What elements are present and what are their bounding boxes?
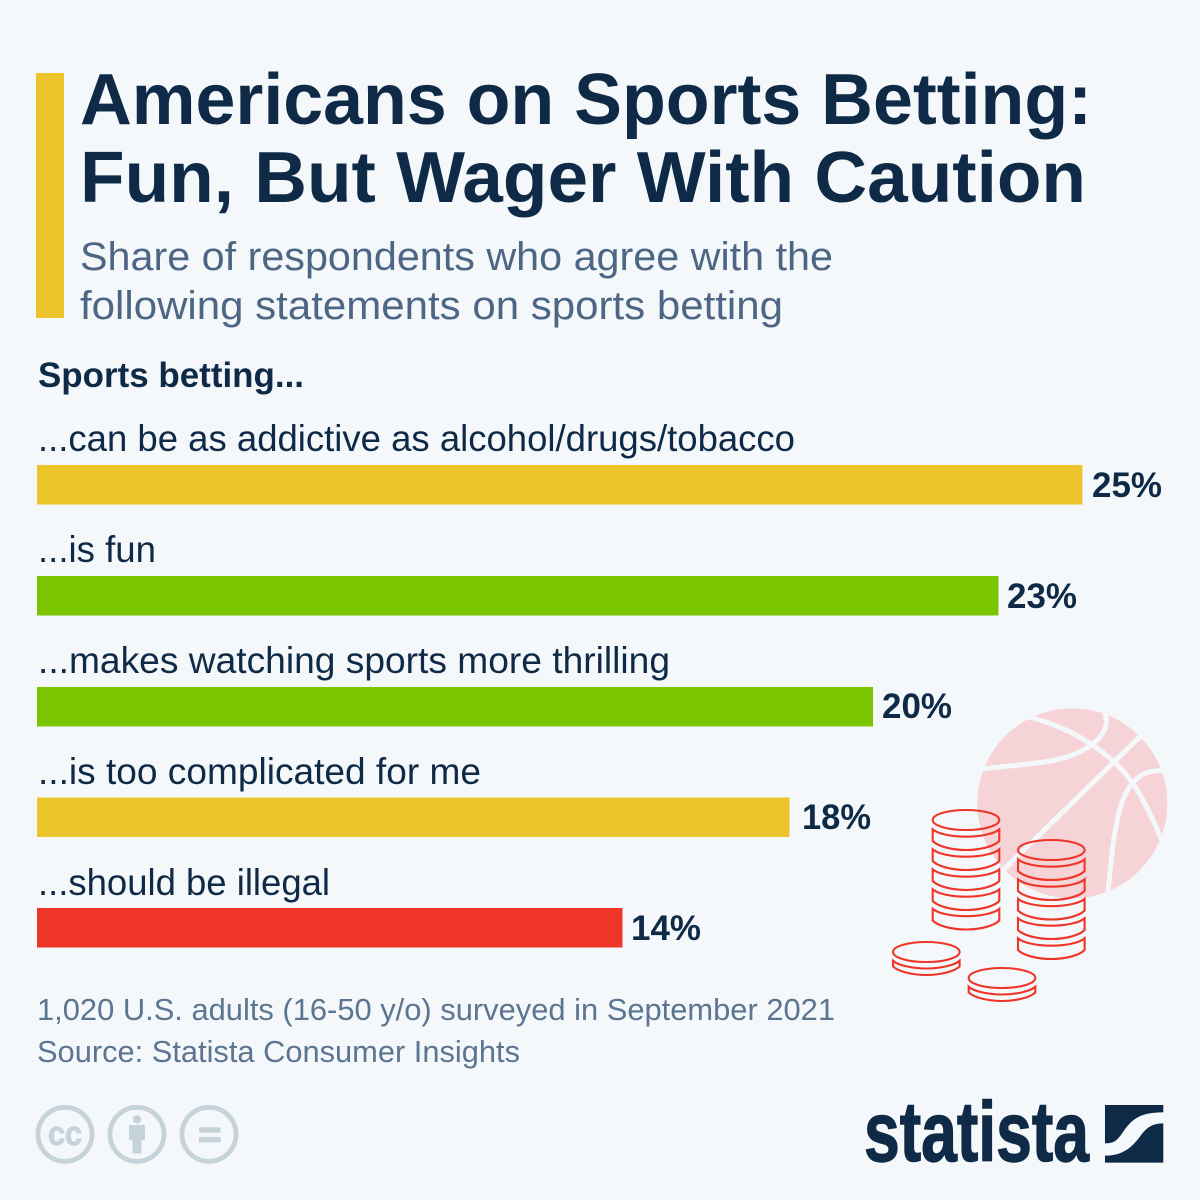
row: illegal 14%: ...should be illegal — [38, 862, 330, 903]
row: fun 23%: 23% — [1007, 577, 1077, 616]
icon: cc: cc — [48, 1115, 82, 1153]
row: fun 23%: ...is fun — [38, 529, 156, 570]
row: thrilling 20%: 20% — [882, 687, 952, 726]
row: addictive 25%: 25% — [1092, 466, 1162, 505]
row: complicated 18%: 18% — [802, 798, 871, 837]
logo mark — [1105, 1105, 1163, 1163]
row: fun 23% — [37, 529, 1077, 616]
icon: cc — [38, 1107, 92, 1161]
row: thrilling 20% — [37, 640, 952, 726]
single coin right — [969, 968, 1035, 1001]
footnote: survey and source — [37, 992, 835, 1069]
subtitle — [80, 235, 833, 328]
single coin left — [893, 942, 960, 975]
row: complicated 18%: ...is too complicated for me — [38, 751, 481, 792]
icon: creative commons licence — [38, 1107, 236, 1161]
subtitle: following statements on sports betting — [80, 284, 783, 328]
title — [80, 60, 1092, 218]
icon: attribution — [110, 1107, 164, 1161]
coin stack right — [1018, 840, 1085, 959]
row: complicated 18% — [37, 751, 871, 837]
chart heading: Sports betting... — [38, 356, 304, 395]
row: addictive 25% — [37, 418, 1162, 505]
row: illegal 14%: 14% — [631, 909, 701, 948]
title: Fun, But Wager With Caution — [80, 138, 1086, 218]
icon: basketball — [977, 708, 1167, 898]
icon: coins — [893, 810, 1085, 1001]
accent bar — [36, 73, 64, 318]
row: addictive 25%: ...can be as addictive as alcohol/drugs/tobacco — [38, 418, 795, 459]
footnote: survey and source: 1,020 U.S. adults (16-50 y/o) surveyed in September 2021 — [37, 992, 835, 1027]
subtitle: Share of respondents who agree with the — [80, 235, 833, 279]
title: Americans on Sports Betting: — [80, 60, 1092, 140]
footnote: survey and source: Source: Statista Consumer Insights — [37, 1034, 520, 1069]
row: thrilling 20%: ...makes watching sports more thrilling — [38, 640, 670, 681]
logo: statista: statista — [864, 1085, 1090, 1179]
coin stack left — [933, 810, 999, 930]
row: illegal 14% — [37, 862, 701, 948]
icon: no derivatives — [182, 1107, 236, 1161]
bar chart — [37, 418, 1162, 948]
